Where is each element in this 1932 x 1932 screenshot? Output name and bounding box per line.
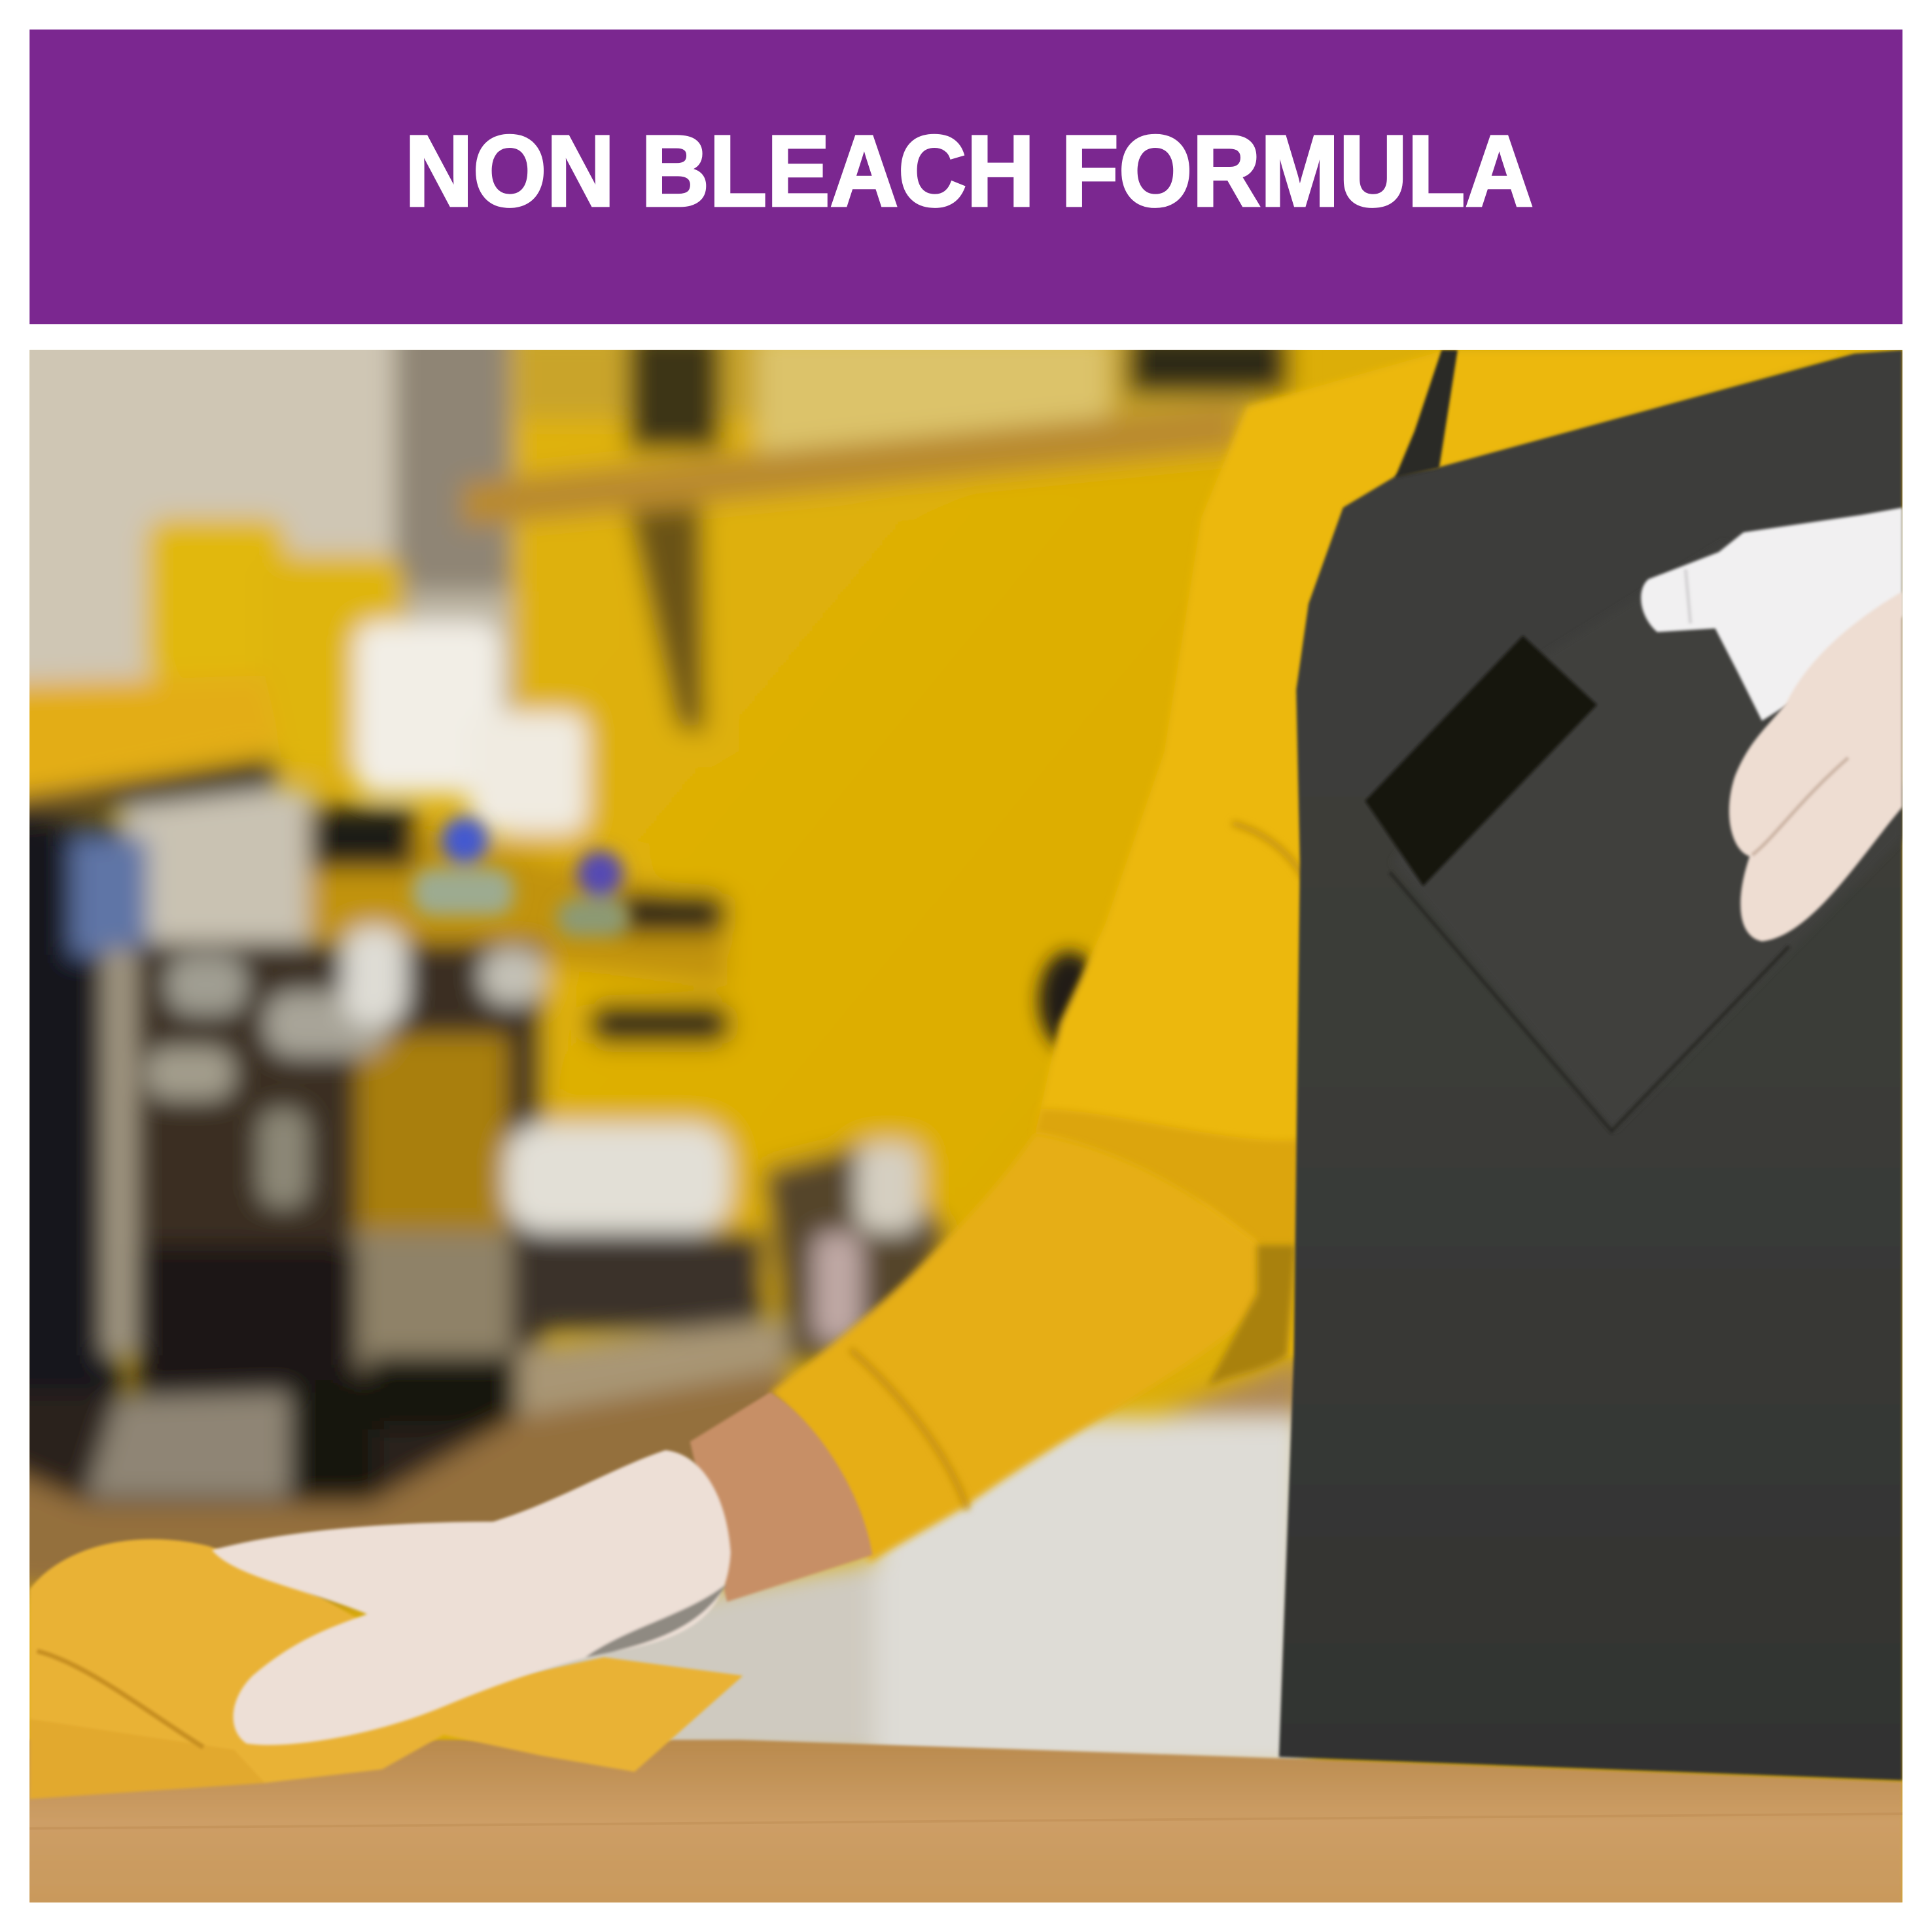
dishes (505, 1124, 729, 1232)
right gloved hand (1729, 591, 1903, 941)
yellow sleeve and arm (690, 351, 1854, 1602)
upper arm fold (1232, 823, 1304, 877)
apron pocket (1392, 542, 1903, 1130)
blurred cafe background (0, 321, 1306, 1774)
apron (1279, 350, 1903, 1780)
yellow cups (145, 518, 287, 684)
sleeve fold shadow (1208, 1244, 1296, 1386)
spray bottle trigger (1641, 508, 1903, 721)
table seam (29, 1814, 1903, 1829)
indicator lights (413, 817, 1100, 1050)
white cups (355, 622, 501, 795)
apron neck strap (1395, 350, 1458, 478)
elbow shadow band (1035, 1109, 1300, 1244)
pocket edge (1390, 872, 1789, 1131)
finger crease (1752, 758, 1848, 855)
counter tabletop (0, 1740, 1903, 1922)
yellow cloth (29, 1539, 743, 1799)
left gloved hand (212, 1450, 731, 1745)
white cabinet (518, 1558, 875, 1762)
counter (518, 1318, 788, 1430)
black pocket patch (1365, 636, 1597, 886)
sleeve cuff shadow (850, 1349, 967, 1509)
forearm sleeve (770, 1134, 1259, 1562)
title: NON BLEACH FORMULA (405, 114, 1534, 228)
bare wrist (690, 1392, 872, 1602)
torso and upper sleeve (1035, 351, 1854, 1356)
header banner (29, 29, 1903, 324)
coffee machine (123, 788, 314, 943)
